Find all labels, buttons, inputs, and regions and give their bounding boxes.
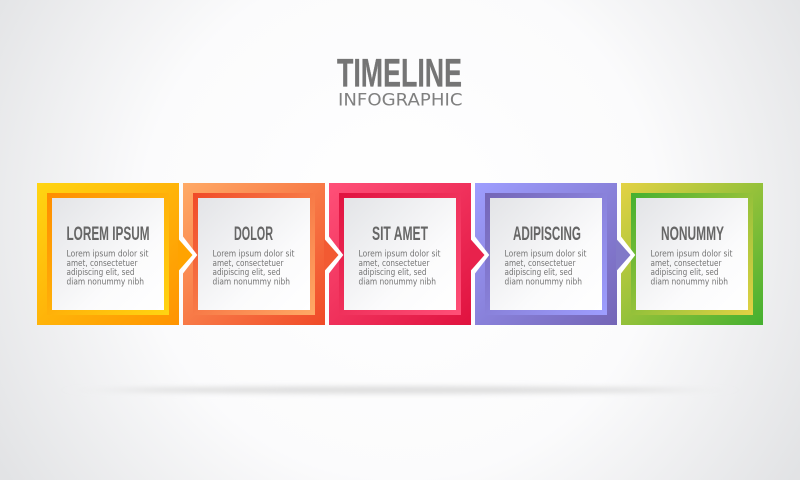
- body text: sit amet: adipiscing elit, sed: [358, 267, 426, 277]
- panel: nonummy: [621, 183, 763, 325]
- body text: dolor: Lorem ipsum dolor sit: [212, 248, 295, 258]
- floor shadow: [110, 386, 690, 394]
- heading: sit amet: SIT AMET: [372, 223, 428, 245]
- heading: nonummy: NONUMMY: [661, 223, 724, 245]
- body text: nonummy: adipiscing elit, sed: [650, 267, 718, 277]
- body text: lorem ipsum: adipiscing elit, sed: [66, 267, 134, 277]
- body text: nonummy: amet, consectetuer: [650, 258, 722, 268]
- body text: dolor: adipiscing elit, sed: [212, 267, 280, 277]
- body text: adipiscing: adipiscing elit, sed: [504, 267, 572, 277]
- body text: lorem ipsum: diam nonummy nibh: [66, 276, 144, 286]
- body text: dolor: [212, 248, 295, 286]
- body text: lorem ipsum: [66, 248, 149, 286]
- body text: adipiscing: [504, 248, 587, 286]
- arrow: step 3 to 4: [470, 236, 489, 274]
- body text: nonummy: diam nonummy nibh: [650, 276, 728, 286]
- panel: lorem ipsum: [37, 183, 179, 325]
- heading: lorem ipsum: LOREM IPSUM: [66, 223, 150, 245]
- panel: adipiscing: [475, 183, 617, 325]
- title: TIMELINE: TIMELINE: [337, 52, 462, 96]
- body text: dolor: amet, consectetuer: [212, 258, 284, 268]
- panel: sit amet: [329, 183, 471, 325]
- panel: dolor: [183, 183, 325, 325]
- body text: sit amet: diam nonummy nibh: [358, 276, 436, 286]
- arrow: step 2 to 3: [324, 236, 343, 274]
- subtitle: INFOGRAPHIC: INFOGRAPHIC: [338, 90, 462, 110]
- body text: adipiscing: amet, consectetuer: [504, 258, 576, 268]
- body text: nonummy: Lorem ipsum dolor sit: [650, 248, 733, 258]
- body text: lorem ipsum: Lorem ipsum dolor sit: [66, 248, 149, 258]
- heading: dolor: DOLOR: [234, 223, 273, 245]
- arrow: step 4 to 5: [616, 236, 635, 274]
- body text: adipiscing: Lorem ipsum dolor sit: [504, 248, 587, 258]
- arrow: step 1 to 2: [178, 236, 197, 274]
- body text: adipiscing: diam nonummy nibh: [504, 276, 582, 286]
- body text: nonummy: [650, 248, 733, 286]
- title: [337, 52, 462, 110]
- heading: adipiscing: ADIPISCING: [513, 223, 581, 245]
- body text: sit amet: amet, consectetuer: [358, 258, 430, 268]
- body text: sit amet: [358, 248, 441, 286]
- body text: dolor: diam nonummy nibh: [212, 276, 290, 286]
- body text: sit amet: Lorem ipsum dolor sit: [358, 248, 441, 258]
- body text: lorem ipsum: amet, consectetuer: [66, 258, 138, 268]
